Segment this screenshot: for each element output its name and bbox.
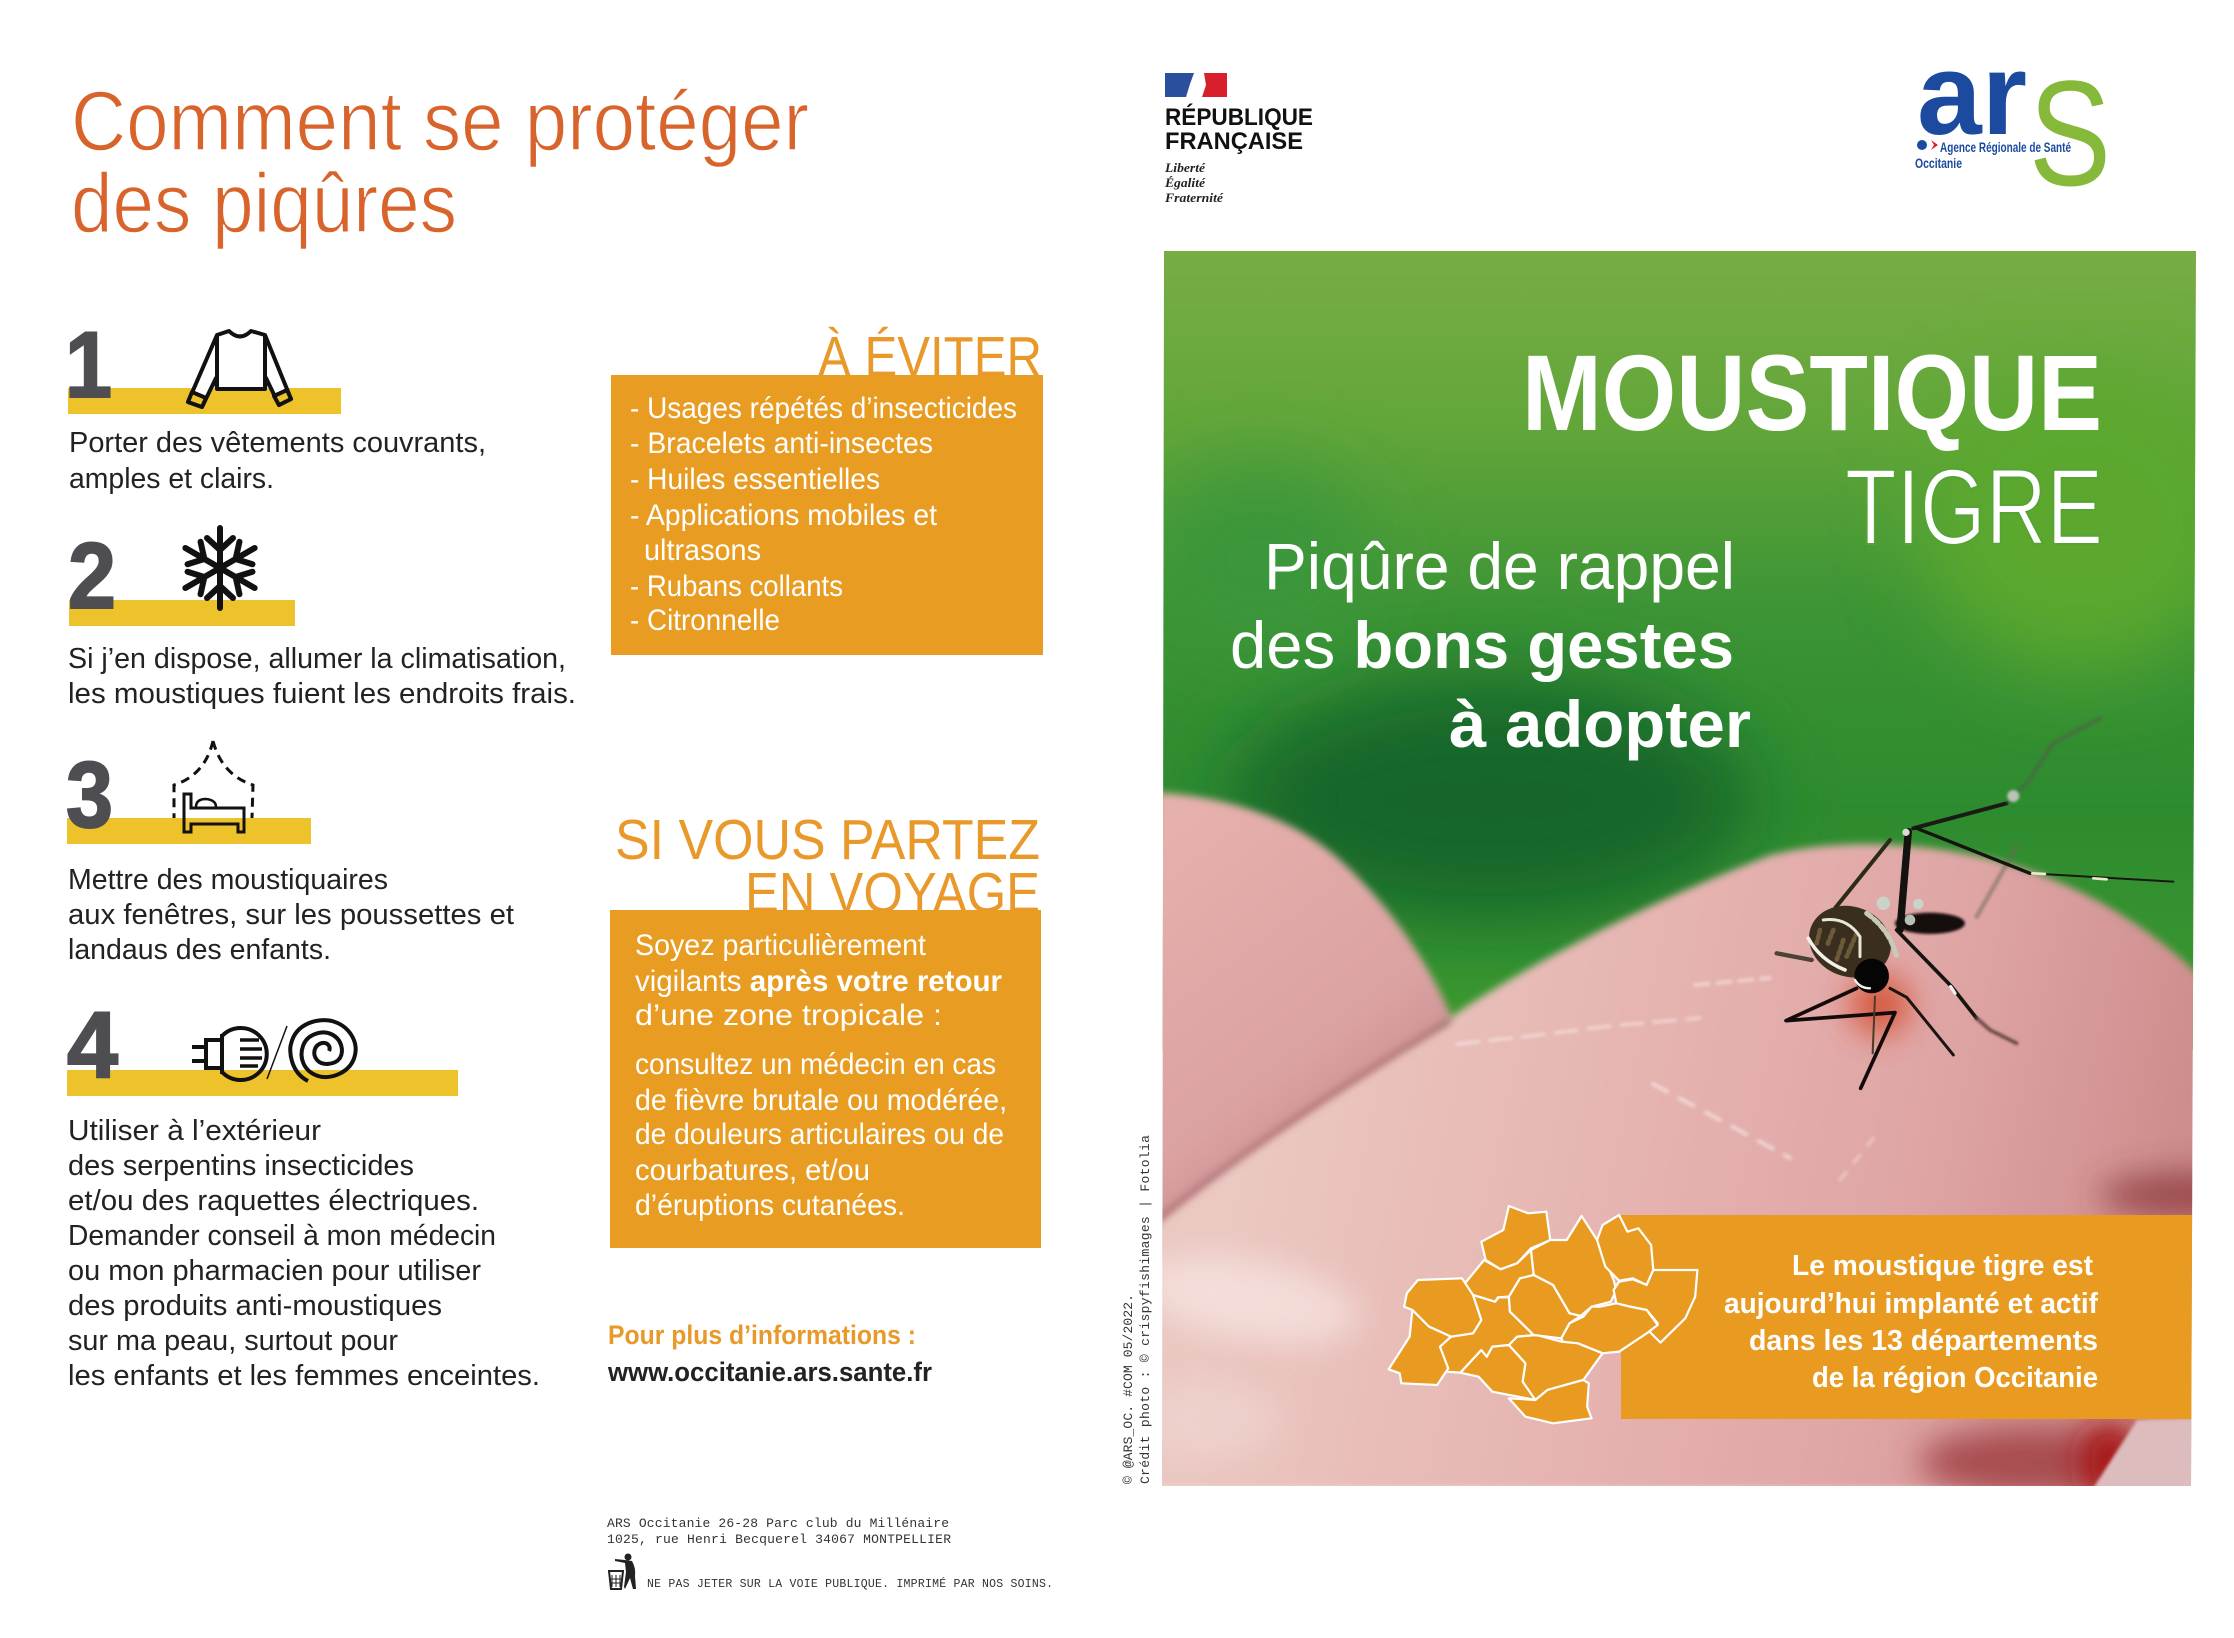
title: Comment se protéger bbox=[71, 74, 809, 168]
icon: plug diffuser and coil bbox=[192, 1020, 356, 1081]
step 2: 2 bbox=[68, 523, 116, 628]
step 1: 1 bbox=[65, 312, 112, 417]
logo: République française: RÉPUBLIQUE bbox=[1165, 103, 1313, 131]
orange banner: dans les 13 départements bbox=[1749, 1325, 2098, 1357]
icon: sweater bbox=[188, 331, 291, 407]
panel: si vous partez en voyage: d’éruptions cutanées. bbox=[635, 1189, 905, 1222]
title: des piqûres bbox=[71, 156, 457, 250]
credits: © @ARS_OC. #COM 05/2022. bbox=[1121, 1294, 1136, 1484]
panel: si vous partez en voyage: Soyez particulièrement bbox=[635, 929, 927, 962]
logo: ARS: S bbox=[2029, 49, 2111, 217]
panel: si vous partez en voyage: de fièvre brutale ou modérée, bbox=[635, 1084, 1007, 1117]
panel: à éviter: - Applications mobiles et bbox=[630, 499, 938, 532]
step 4: ou mon pharmacien pour utiliser bbox=[68, 1255, 481, 1287]
panel: si vous partez en voyage: SI VOUS PARTEZ bbox=[615, 808, 1040, 872]
step 4: 4 bbox=[67, 992, 118, 1097]
icon: bed under mosquito net bbox=[174, 741, 253, 832]
orange banner: aujourd’hui implanté et actif bbox=[1724, 1288, 2098, 1320]
orange banner: de la région Occitanie bbox=[1812, 1362, 2098, 1394]
step 4: Demander conseil à mon médecin bbox=[68, 1220, 496, 1252]
cover headline: TIGRE bbox=[1845, 446, 2103, 567]
cover headline: à adopter bbox=[1449, 687, 1751, 761]
title bbox=[71, 74, 809, 250]
logo: ARS bbox=[1915, 29, 2111, 217]
more information bbox=[607, 1320, 932, 1387]
more information: Pour plus d’informations : bbox=[608, 1320, 916, 1350]
logo: ARS: Agence Régionale de Santé bbox=[1940, 139, 2071, 155]
left fingertip bbox=[1150, 792, 1452, 1270]
step 4: Utiliser à l’extérieur bbox=[68, 1115, 321, 1147]
step 3: Mettre des moustiquaires bbox=[68, 864, 388, 896]
cover headline bbox=[1230, 332, 2103, 761]
address: ARS Occitanie 26-28 Parc club du Millénaire bbox=[607, 1516, 949, 1531]
icon: snowflake bbox=[179, 528, 261, 608]
skin creases bbox=[1457, 978, 1880, 1180]
panel: si vous partez en voyage bbox=[610, 808, 1041, 1248]
panel: à éviter: À ÉVITER bbox=[818, 325, 1042, 389]
step 2: les moustiques fuient les endroits frais. bbox=[68, 678, 576, 710]
address: 1025, rue Henri Becquerel 34067 MONTPELLIER bbox=[607, 1532, 951, 1547]
panel: si vous partez en voyage: courbatures, et/ou bbox=[635, 1154, 870, 1187]
logo: ARS: ar bbox=[1917, 29, 2027, 159]
cover headline: Piqûre de rappel bbox=[1264, 529, 1735, 603]
mosquito bbox=[1777, 718, 2173, 1088]
panel: si vous partez en voyage: EN VOYAGE bbox=[745, 861, 1040, 925]
step 3: landaus des enfants. bbox=[68, 934, 331, 966]
panel: à éviter bbox=[611, 325, 1043, 655]
step 4: des serpentins insecticides bbox=[68, 1150, 414, 1182]
panel: si vous partez en voyage: de douleurs articulaires ou de bbox=[635, 1118, 1004, 1151]
panel: à éviter: ultrasons bbox=[644, 534, 761, 567]
step 2 bbox=[68, 523, 576, 710]
logo: République française bbox=[1164, 73, 1313, 205]
step 2: Si j’en dispose, allumer la climatisation, bbox=[68, 643, 566, 675]
cover headline: MOUSTIQUE bbox=[1522, 332, 2102, 453]
step 1: Porter des vêtements couvrants, bbox=[69, 427, 486, 459]
panel: à éviter: - Citronnelle bbox=[630, 604, 780, 637]
panel: si vous partez en voyage: vigilants après votre retour bbox=[635, 965, 1002, 998]
address bbox=[607, 1516, 951, 1547]
orange banner bbox=[1389, 1206, 2196, 1423]
step 4: des produits anti-moustiques bbox=[68, 1290, 442, 1322]
valley shadow bbox=[1155, 1020, 1450, 1222]
step 4 bbox=[67, 992, 540, 1392]
panel: à éviter: - Rubans collants bbox=[630, 570, 843, 603]
more information: www.occitanie.ars.sante.fr bbox=[607, 1357, 932, 1387]
panel: si vous partez en voyage: consultez un médecin en cas bbox=[635, 1048, 996, 1081]
cover headline: des bons gestes bbox=[1230, 608, 1734, 682]
panel: à éviter: - Usages répétés d’insecticides bbox=[630, 392, 1017, 425]
step 3: 3 bbox=[66, 742, 113, 847]
step 3: aux fenêtres, sur les poussettes et bbox=[68, 899, 514, 931]
logo: ARS: Occitanie bbox=[1915, 155, 1962, 171]
panel: si vous partez en voyage: d’une zone tropicale : bbox=[635, 999, 942, 1032]
map of Occitanie bbox=[1389, 1206, 1697, 1423]
logo: République française: Égalité bbox=[1164, 175, 1206, 190]
credits bbox=[1121, 1135, 1153, 1484]
logo: République française: FRANÇAISE bbox=[1165, 128, 1303, 155]
step 3 bbox=[66, 741, 514, 966]
panel: à éviter: - Bracelets anti-insectes bbox=[630, 427, 933, 460]
step 4: sur ma peau, surtout pour bbox=[68, 1325, 398, 1357]
step 4: et/ou des raquettes électriques. bbox=[68, 1185, 479, 1217]
step 4: les enfants et les femmes enceintes. bbox=[68, 1360, 540, 1392]
step 1: amples et clairs. bbox=[69, 463, 274, 495]
icon: litter bin bbox=[609, 1554, 636, 1589]
credits: Crédit photo : © crispyfishimages | Fotolia bbox=[1138, 1135, 1153, 1484]
legal notice: NE PAS JETER SUR LA VOIE PUBLIQUE. IMPRIMÉ PAR NOS SOINS. bbox=[647, 1577, 1053, 1591]
panel: cover photo bbox=[1135, 250, 2234, 1502]
logo: République française: Fraternité bbox=[1164, 190, 1224, 205]
panel: à éviter: - Huiles essentielles bbox=[630, 463, 880, 496]
main finger bbox=[1150, 844, 2200, 1490]
step 1 bbox=[65, 312, 486, 495]
orange banner: Le moustique tigre est bbox=[1792, 1250, 2093, 1282]
logo: République française: Liberté bbox=[1164, 160, 1206, 175]
